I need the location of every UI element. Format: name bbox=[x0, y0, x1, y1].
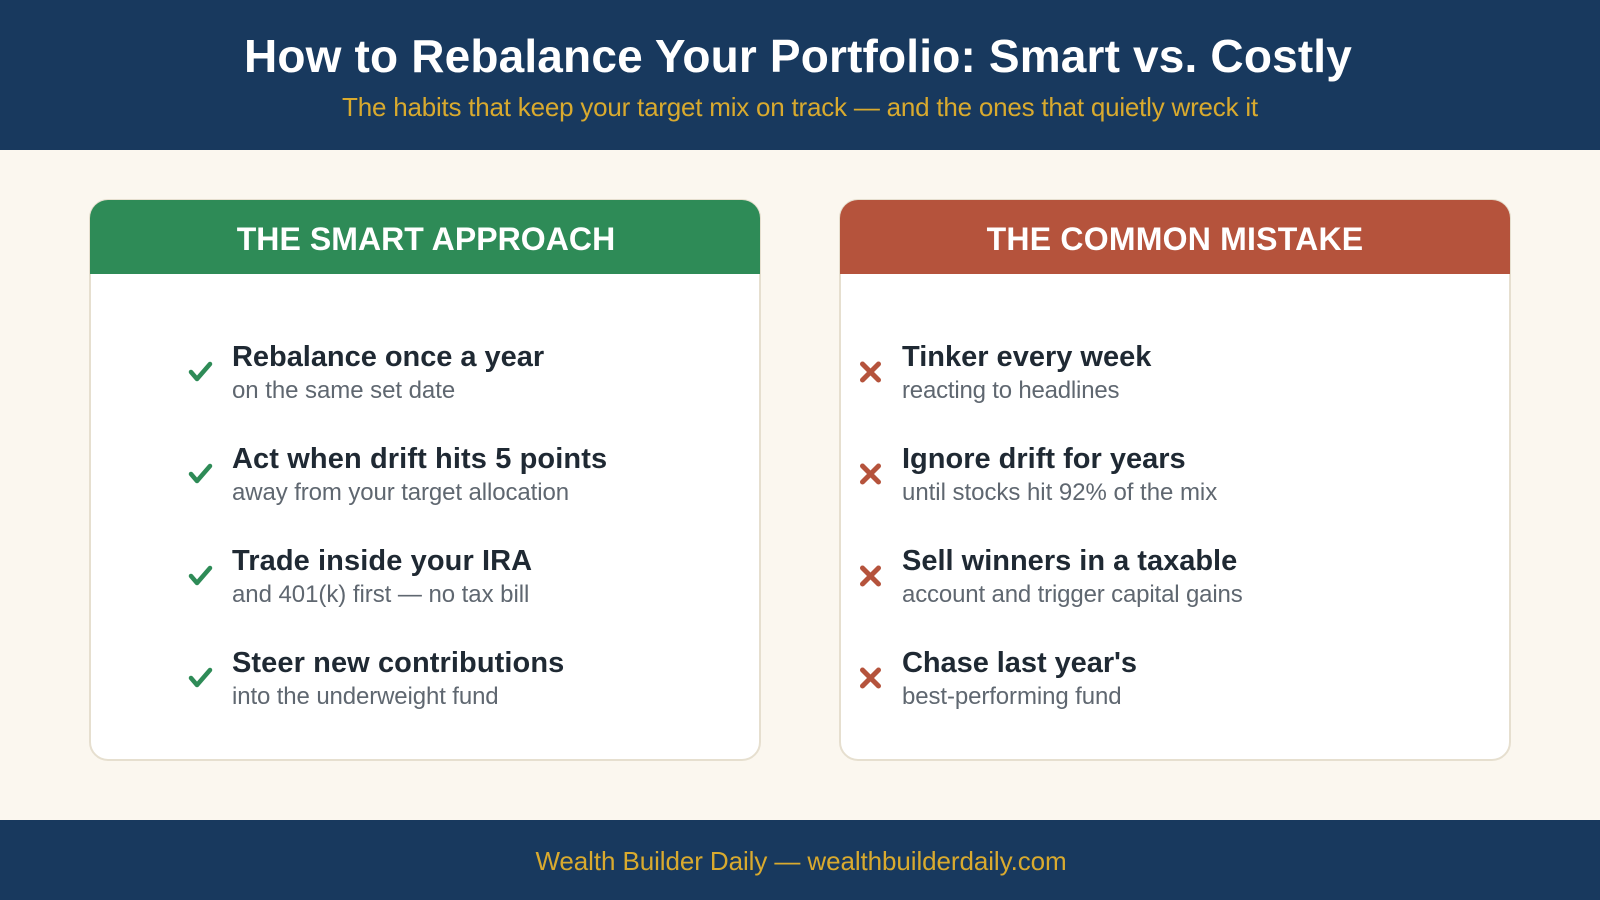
icon: check bbox=[188, 566, 212, 586]
text: ignore drift: until stocks hit 92% of the mix bbox=[902, 479, 1217, 506]
item: steer new contributions bbox=[188, 647, 564, 710]
footer band bbox=[0, 820, 1600, 900]
text: sell winners bbox=[902, 545, 1243, 608]
item: sell winners bbox=[860, 545, 1243, 608]
footer text: Wealth Builder Daily — wealthbuilderdaily.com bbox=[535, 846, 1067, 876]
icon: cross bbox=[860, 668, 881, 688]
text: trade inside your ira: Trade inside your IRA bbox=[232, 545, 532, 577]
text: sell winners: Sell winners in a taxable bbox=[902, 545, 1237, 577]
text: trade inside your ira: and 401(k) first — no tax bill bbox=[232, 581, 529, 608]
text: ignore drift bbox=[902, 443, 1217, 506]
text: rebalance once a year bbox=[232, 341, 544, 404]
panel: the common mistake bbox=[839, 199, 1511, 761]
icon: cross bbox=[860, 464, 881, 484]
text: tinker every week: Tinker every week bbox=[902, 341, 1151, 373]
title: How to Rebalance Your Portfolio: Smart vs. Costly bbox=[244, 30, 1352, 82]
item: trade inside your ira bbox=[188, 545, 532, 608]
panel: the smart approach bbox=[89, 199, 761, 761]
icon: cross bbox=[860, 362, 881, 382]
item: act when drift hits 5 points bbox=[188, 443, 607, 506]
panel heading: smart bbox=[90, 200, 760, 274]
text: sell winners: account and trigger capital gains bbox=[902, 581, 1243, 608]
item: chase last year's bbox=[860, 647, 1137, 710]
text: steer new contributions: into the underweight fund bbox=[232, 683, 499, 710]
text: steer new contributions bbox=[232, 647, 564, 710]
panel heading: mistake bbox=[840, 200, 1510, 274]
text: rebalance once a year: Rebalance once a year bbox=[232, 341, 544, 373]
text: ignore drift: Ignore drift for years bbox=[902, 443, 1186, 475]
text: tinker every week: reacting to headlines bbox=[902, 377, 1119, 404]
panel heading: mistake: THE COMMON MISTAKE bbox=[987, 221, 1363, 257]
text: chase last year's: Chase last year's bbox=[902, 647, 1137, 679]
icon: check bbox=[188, 362, 212, 382]
item: ignore drift bbox=[860, 443, 1217, 506]
text: trade inside your ira bbox=[232, 545, 532, 608]
text: act when drift hits 5 points: away from your target allocation bbox=[232, 479, 569, 506]
item: rebalance once a year bbox=[188, 341, 544, 404]
header band bbox=[0, 0, 1600, 150]
text: chase last year's: best-performing fund bbox=[902, 683, 1121, 710]
text: rebalance once a year: on the same set date bbox=[232, 377, 455, 404]
subtitle: The habits that keep your target mix on track — and the ones that quietly wreck it bbox=[342, 92, 1258, 122]
text: act when drift hits 5 points: Act when drift hits 5 points bbox=[232, 443, 607, 475]
text: steer new contributions: Steer new contributions bbox=[232, 647, 564, 679]
icon: check bbox=[188, 464, 212, 484]
icon: cross bbox=[860, 566, 881, 586]
text: chase last year's bbox=[902, 647, 1137, 710]
item: tinker every week bbox=[860, 341, 1152, 404]
icon: check bbox=[188, 668, 212, 688]
text: act when drift hits 5 points bbox=[232, 443, 607, 506]
text: tinker every week bbox=[902, 341, 1152, 404]
panel heading: smart: THE SMART APPROACH bbox=[237, 221, 615, 257]
